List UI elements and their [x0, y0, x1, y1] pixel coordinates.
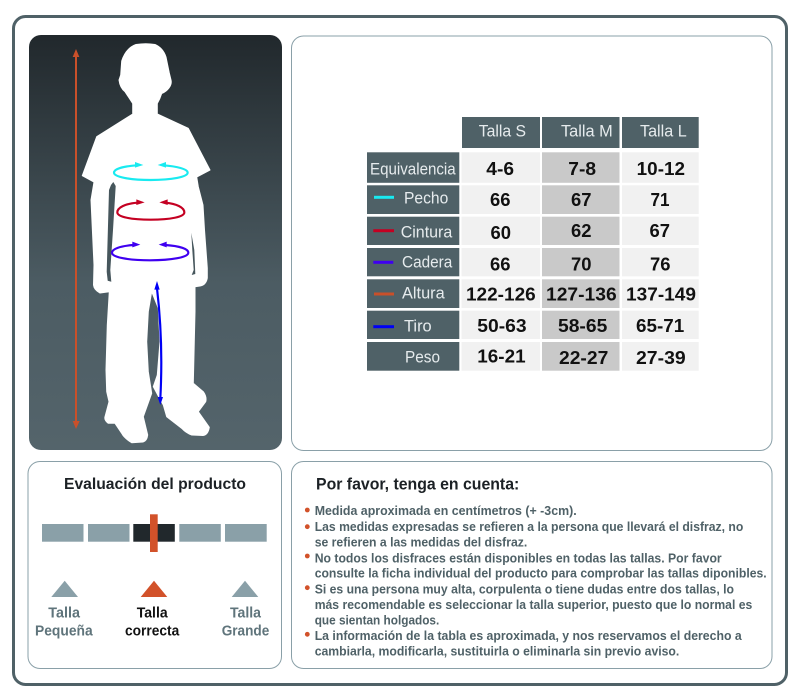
notes text: No todos los disfraces están disponibles en todas las tallas. Por favor	[315, 551, 722, 565]
notes text: La información de la tabla es aproximada, y nos reservamos el derecho a	[315, 629, 743, 643]
row: Peso: Peso	[405, 348, 440, 366]
header: Talla L	[622, 117, 699, 148]
arm gaps	[107, 182, 195, 282]
row: Tiro: 65-71	[636, 316, 684, 336]
panel: body silhouette	[29, 35, 282, 450]
notes text: consulte la ficha individual del producto para comprobar las tallas diponibles.	[315, 567, 767, 581]
row: Cadera: 66	[490, 255, 510, 275]
row: Cintura: 60	[490, 223, 511, 243]
row: Cadera	[367, 248, 699, 276]
inseam arrow	[154, 281, 163, 405]
row: Equivalencia: Equivalencia	[370, 161, 456, 179]
row: Peso: 16-21	[477, 347, 526, 367]
row: Cintura: 67	[650, 221, 670, 241]
table panel border	[292, 36, 772, 450]
header: Talla M: Talla M	[561, 123, 613, 141]
row: Altura: 127-136	[546, 285, 617, 305]
header: Talla S	[462, 117, 540, 148]
marker: correct size	[125, 581, 180, 640]
row: Cadera: 76	[650, 255, 670, 275]
row: Pecho: 71	[650, 190, 670, 210]
notes text: Las medidas expresadas se refieren a la persona que llevará el disfraz, no	[315, 520, 744, 534]
row: Cadera: 70	[571, 255, 592, 275]
panel: product evaluation	[28, 462, 282, 668]
marker: correct size: Talla	[137, 606, 169, 622]
notes panel border	[292, 462, 772, 668]
row: Altura: 122-126	[466, 285, 536, 305]
row: Tiro: 50-63	[477, 316, 527, 336]
panel: notes	[292, 462, 772, 668]
marker: small size: Talla	[48, 606, 81, 622]
notes text: cambiarla, modificarla, sustituirla o eliminarla sin previo aviso.	[315, 645, 679, 659]
height arrow	[73, 49, 80, 429]
marker: small size: Pequeña	[35, 624, 94, 640]
evaluation heading: Evaluación del producto	[64, 476, 246, 493]
notes text: Medida aproximada en centímetros (+ -3cm).	[315, 504, 577, 518]
fit scale bar	[42, 514, 267, 552]
row: Cintura: 62	[571, 221, 592, 241]
notes text: se refieren a las medidas del disfraz.	[315, 536, 527, 550]
row: Altura: 137-149	[626, 285, 696, 305]
row: Equivalencia: 4-6	[486, 159, 514, 179]
row: Pecho	[367, 185, 699, 214]
row: Tiro: 58-65	[558, 316, 607, 336]
row: Equivalencia: 7-8	[568, 159, 596, 179]
row: Tiro: Tiro	[404, 318, 432, 336]
header: Talla M	[542, 117, 620, 148]
row: Equivalencia	[367, 152, 699, 183]
row: Peso: 27-39	[636, 348, 686, 368]
row: Cintura	[367, 217, 699, 245]
bullets	[305, 508, 310, 637]
row: Tiro	[367, 311, 699, 339]
row: Altura	[367, 279, 699, 308]
marker: large size	[222, 581, 269, 640]
row: Pecho: 67	[571, 190, 592, 210]
notes text: Si es una persona muy alta, corpulenta o tiene dudas entre dos tallas, lo	[315, 582, 734, 596]
marker: large size: Grande	[222, 624, 269, 640]
row: Equivalencia: 10-12	[637, 159, 685, 179]
evaluation panel border	[28, 462, 282, 668]
row: Peso	[367, 342, 699, 371]
row: Cadera: Cadera	[402, 253, 453, 271]
header: Talla L: Talla L	[640, 123, 687, 141]
child silhouette	[82, 44, 210, 443]
chest arrow	[114, 162, 188, 180]
hip arrow	[112, 242, 188, 260]
measurement arrows	[73, 49, 188, 429]
row: Cintura: Cintura	[401, 224, 453, 242]
marker: correct size: correcta	[125, 624, 180, 640]
marker: small size	[35, 581, 94, 640]
row: Pecho: Pecho	[404, 189, 448, 207]
panel background	[29, 35, 282, 450]
waist arrow	[117, 199, 184, 220]
panel: size table	[292, 36, 772, 450]
notes text	[315, 504, 767, 659]
notes text: más recomendable es seleccionar la talla superior, puesto que lo normal es	[315, 598, 752, 612]
notes heading: Por favor, tenga en cuenta:	[316, 474, 519, 493]
row: Peso: 22-27	[559, 348, 608, 368]
notes text: que sientan holgados.	[315, 613, 439, 627]
row: Pecho: 66	[490, 190, 510, 210]
row: Altura: Altura	[402, 284, 446, 302]
marker: large size: Talla	[230, 606, 262, 622]
header: Talla S: Talla S	[479, 123, 526, 141]
